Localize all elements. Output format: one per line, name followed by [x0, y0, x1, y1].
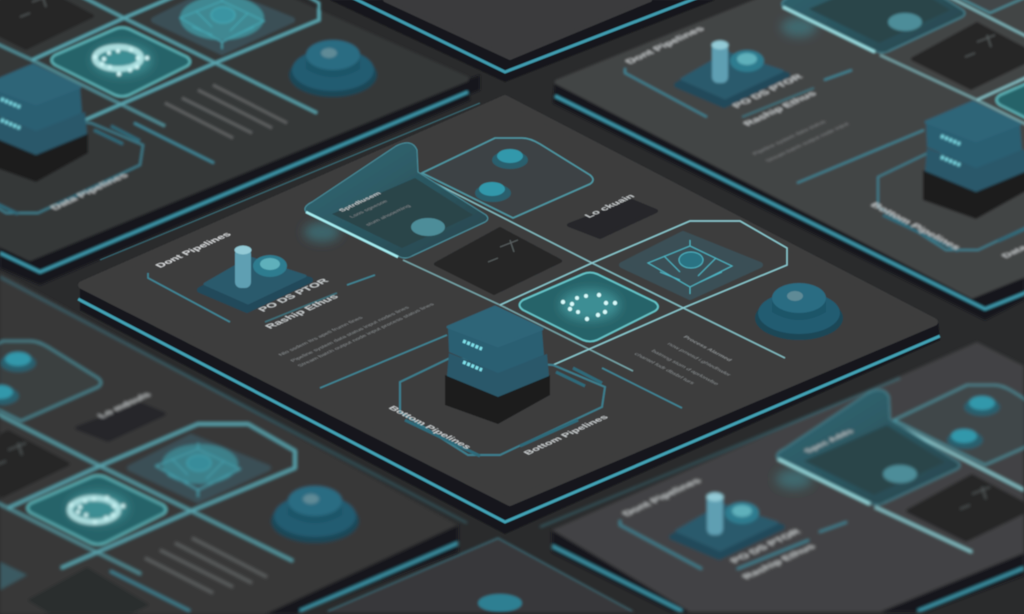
glass card text: stum ahsoeming — [365, 204, 412, 227]
dots glow: bottom left — [70, 498, 118, 522]
main board contents — [148, 138, 787, 408]
panel: bottom right board — [540, 342, 1024, 612]
glass card text: Sptrdlusem — [337, 191, 383, 213]
black base — [445, 375, 550, 424]
text labels: main board — [154, 191, 733, 456]
process text block: chantel fodr dbsbrl turs — [632, 352, 695, 385]
panel: bottom left board — [0, 272, 467, 614]
knob: top left — [289, 40, 377, 97]
chip hub — [679, 252, 703, 268]
labels: bottom right board: Dont Pipelines — [620, 477, 704, 517]
board base edge — [80, 287, 940, 534]
glowing dot ring — [561, 293, 617, 321]
labels: bottom right board: PO DS PTOR — [728, 528, 804, 564]
server stack — [445, 307, 550, 424]
process text block: batmng stom d aprlorwlse — [649, 349, 719, 386]
dark button — [436, 229, 560, 293]
subheading: PO DS PTOR — [256, 277, 332, 313]
board contents: bottom right — [672, 385, 1024, 557]
labels: top right board: PO DS PTOR — [730, 73, 806, 109]
text bars: top left — [165, 85, 287, 138]
grid lines — [403, 177, 787, 371]
process text block: Process Alarmed — [681, 335, 733, 362]
label button — [569, 201, 656, 237]
process text block — [632, 335, 733, 386]
grid lines: bottom right — [875, 424, 1024, 552]
button label: Lo ckuain — [583, 193, 638, 219]
process text block: now pmesd i.ghtedhwler — [665, 342, 732, 377]
labels: bottom right board — [620, 428, 856, 580]
board edge line — [0, 277, 467, 523]
labels: top right board: Bottom Pipelines — [868, 201, 963, 251]
upper block front — [448, 328, 544, 373]
circuit cell — [622, 234, 760, 297]
label: top left server: Data Pipelines — [48, 172, 131, 211]
labels: top right board: Dont Pipelines — [623, 25, 707, 65]
chip cell — [520, 272, 658, 342]
knob glyph — [787, 291, 803, 301]
slot bars — [405, 368, 602, 456]
hex outline around server — [400, 358, 605, 455]
board contents: top right — [625, 0, 1024, 203]
dots glow: top left — [95, 47, 141, 69]
knob cylinder — [772, 298, 826, 320]
circuit glyph — [648, 240, 732, 294]
panel: main board — [78, 99, 940, 534]
card disc — [411, 218, 445, 236]
subheading two: Raship Ethus — [263, 293, 341, 330]
disc top — [479, 182, 505, 196]
disc top — [497, 149, 523, 163]
board contents: top left — [0, 0, 319, 163]
lower block — [447, 353, 549, 397]
knob top — [772, 283, 826, 313]
glass card text: Lsos sgeesoe — [349, 200, 390, 219]
cylinder top — [234, 246, 252, 254]
disc — [492, 151, 528, 169]
top block — [448, 307, 542, 346]
dot glow — [560, 289, 620, 321]
text bars: bottom left — [145, 538, 267, 593]
glowing card edge — [306, 212, 398, 257]
teal patch at left — [0, 562, 27, 590]
labels: bottom right board: Spec Adds — [802, 428, 856, 454]
labels: top right board: Raship Ethus — [741, 90, 819, 127]
icon: teal element at bottom — [478, 594, 522, 612]
lens centre — [260, 258, 280, 270]
board edge line — [540, 378, 900, 527]
board contents: bottom left — [0, 341, 295, 611]
server: top left — [0, 65, 143, 214]
grid and accent group — [148, 177, 787, 408]
server group — [400, 307, 605, 456]
cylinder — [235, 248, 251, 288]
knob — [755, 283, 843, 340]
dark block at bottom — [27, 567, 150, 614]
paragraph: Stream batch output node input process status lines — [297, 303, 436, 368]
glass card — [305, 143, 488, 258]
panel: top left board — [0, 0, 480, 285]
knob: bottom left — [271, 486, 359, 543]
panel: top centre board — [330, 0, 715, 82]
paragraph: Nlo ssdem Itrs apeti frumn fines — [278, 316, 365, 357]
labels: top right board: Stream batch output node input — [765, 122, 851, 163]
accent lines — [148, 273, 682, 408]
labels: top right board: Pipeline system data status — [752, 120, 828, 156]
panel: top right board — [553, 0, 1024, 320]
server: top right — [878, 102, 1024, 251]
paragraph: Pipeline system data status input nodes lines — [290, 306, 411, 363]
labels: bottom right board: Raship Ethus — [740, 543, 818, 580]
rim line — [100, 103, 480, 260]
pipeline icon — [200, 246, 310, 310]
circuit glow: top left — [180, 0, 264, 40]
card glow — [304, 222, 340, 242]
board edge line — [328, 538, 632, 611]
glyph — [488, 240, 518, 262]
lens — [253, 255, 287, 277]
cyan base line — [78, 299, 940, 522]
circuit glow: bottom left — [162, 444, 238, 484]
accent lines: bottom right — [620, 520, 847, 569]
board surface — [82, 99, 934, 502]
status marks — [463, 341, 482, 370]
top outlined card — [422, 138, 593, 218]
server label left: Bottom Pipelines — [386, 405, 474, 451]
server label right: Bottom Pipelines — [522, 414, 612, 456]
panel: bottom centre board — [325, 538, 636, 612]
cards and pipeline group — [200, 138, 656, 310]
labels: top right board — [623, 25, 1024, 259]
label: bottom left button: Lo mdsuls — [96, 392, 154, 419]
disc — [475, 184, 511, 202]
glass card text — [337, 191, 412, 227]
heading: Dont Pipelines — [154, 231, 234, 269]
